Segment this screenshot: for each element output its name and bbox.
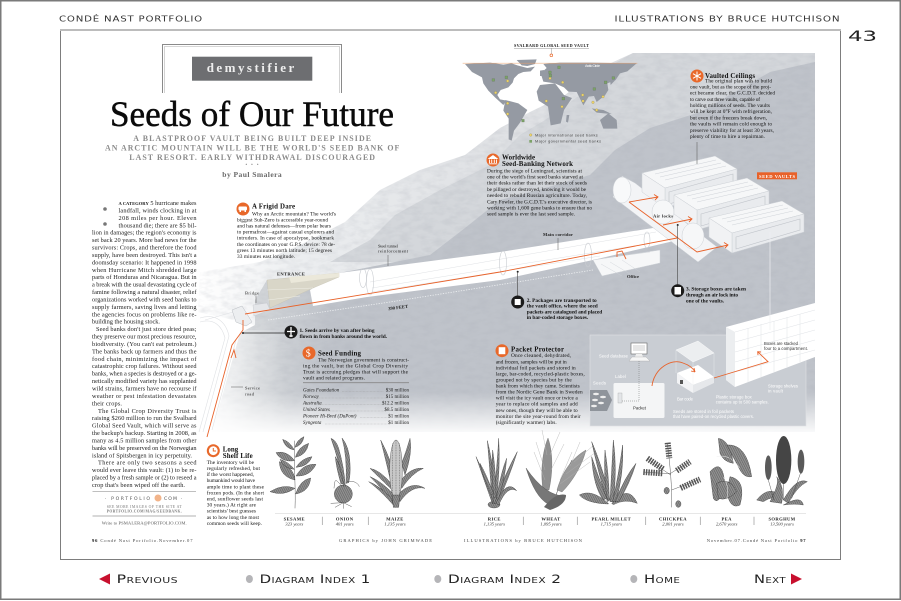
vault 1 [642, 156, 737, 208]
main article text: famine following a natural disaster, relief [92, 289, 197, 296]
panel labels: Boxes are stacked [764, 341, 799, 346]
panel: packet diagram [590, 232, 815, 426]
callout: long shelf life: scientists' best guesses [207, 509, 256, 515]
callout: long shelf life [207, 444, 265, 527]
callout: long shelf life: The inventory will be [207, 460, 255, 466]
callout: vaulted ceilings [690, 70, 775, 164]
callout: a frigid dare: Why an Arctic mountain? The world's [252, 211, 336, 217]
map legend: Major international seed banks [535, 133, 598, 137]
nav: next: Next [754, 572, 786, 586]
map label: Svalbard [514, 43, 589, 57]
step 1: seeds arrive [242, 326, 388, 340]
main article text: banks, when a species is destroyed or a ge- [92, 371, 196, 378]
step 1: seeds arrive: flown in from banks around the world. [300, 334, 388, 340]
vault 3 [709, 201, 804, 253]
main article text: placed by a fresh sample or (2) to reseed a [92, 474, 197, 482]
main article text: biodiversity. (You can't eat petroleum.) [92, 341, 196, 348]
main article text [92, 200, 197, 489]
main article text: building the housing stock. [92, 319, 160, 326]
plant labels: PEA [722, 516, 732, 522]
seed vaults tag: SEED VAULTS [759, 174, 795, 179]
callout: packet protector: monitor the site year-round from their [496, 413, 581, 420]
main article text: the backup's backup. Starting in 2008, as [92, 430, 197, 437]
page number: 43 [848, 29, 877, 45]
map continents [465, 59, 637, 141]
step 2: packages: packets are catalogued and placed [527, 309, 602, 315]
main article text: would ever leave this vault: (1) to be re- [92, 467, 196, 474]
icon: snowflake [690, 70, 704, 82]
callout: packet protector: and frozen, samples will be put in [496, 358, 567, 365]
callout: worldwide seed-banking network: one of the world's first seed banks starved at [487, 174, 584, 180]
panel labels: Seeds [593, 380, 606, 386]
nav: diagram index 1 [246, 572, 371, 586]
step 3: storage boxes [671, 224, 746, 304]
panel labels: four to a compartment. [764, 346, 808, 351]
step 1: seeds arrive: 1. Seeds arrive by van after being [300, 328, 375, 334]
panel labels: Plastic storage box [716, 394, 753, 400]
plant labels: 1,135 years [384, 522, 406, 528]
diagram label: main corridor [543, 232, 573, 250]
funding table: United States [303, 408, 330, 413]
panel labels: Seeds are stored in foil packets [673, 409, 734, 414]
demystifier banner: demystifier [207, 60, 295, 75]
funding table: Norway [302, 395, 320, 400]
plant labels: PEARL MILLET [591, 516, 631, 522]
subtitle: LAST RESORT. EARLY WITHDRAWAL DISCOURAGED [129, 153, 375, 162]
callout: long shelf life: 30 years.) At right are [207, 502, 257, 509]
diagram label: tunnel length: 390 FEET [388, 304, 408, 311]
callout: packet protector: grouped not by species but by the [496, 378, 572, 384]
funding table [302, 383, 409, 426]
nav: home [630, 572, 680, 586]
map: arctic circle: Arctic Circle [585, 64, 600, 68]
portfolio.com callout: PORTFOLIO.COM/MAG/SEEDBANK. [107, 510, 182, 514]
main article text: lion in damages; the region's economy is [92, 230, 197, 237]
callout: seed funding: Seed Funding [318, 350, 362, 358]
main article text: wild strains, farmers have no recourse if [92, 386, 197, 392]
tunnel ribs [360, 232, 650, 295]
main article text: organizations worked with seed banks to [92, 296, 196, 304]
plant: onion [331, 438, 359, 509]
plant labels: ONION [336, 516, 354, 522]
callout: packet protector: Once cleaned, dehydrated, [511, 353, 571, 359]
callout: long shelf life: if the worst happened, [207, 471, 254, 478]
main article text: weather or pest infestation devastates [92, 393, 197, 400]
step 2: packages [511, 271, 602, 321]
map label: Svalbard: SVALBARD GLOBAL SEED VAULT [514, 43, 589, 48]
callout: worldwide seed-banking network: Cary Fowler, the G.C.D.T.'s executive director, is [487, 199, 592, 205]
portfolio.com callout: Write to PSMALERA@PORTFOLIO.COM. [102, 520, 187, 526]
packet [614, 361, 664, 418]
callout: long shelf life: humankind would have [207, 478, 256, 484]
callout: packet protector: individual foil packets and stored in [496, 364, 576, 371]
nav: previous: Previous [117, 572, 178, 586]
callout: long shelf life: regularly refreshed, but [207, 465, 260, 472]
byline: by Paul Smalera [222, 170, 282, 179]
diagram label: air locks: Air locks [653, 214, 673, 218]
main article text: raising $260 million to run the Svalbard [92, 415, 197, 422]
main article text: set back 20 years. More bad news for the [92, 237, 197, 244]
funding table: $15 million [386, 395, 409, 400]
callout: vaulted ceilings: one vault, but as the scope of the proj- [690, 84, 771, 90]
plant: sorghum [757, 436, 807, 505]
funding table: $1 million [388, 414, 409, 420]
portfolio.com callout: SEE MORE IMAGES OF THE SITE AT [107, 505, 182, 509]
plant labels: RICE [488, 516, 501, 522]
packet: Packet [633, 406, 647, 410]
folio left: 96 Condé Nast Portfolio.November.07 [92, 538, 193, 543]
callout: long shelf life: as to how long the most [207, 515, 260, 521]
main article text: landfall, winds clocking in at [118, 207, 197, 214]
title: Seeds of Our Future [110, 94, 394, 134]
portfolio.com callout: · PORTFOLIO [105, 496, 150, 502]
icon: bank [486, 154, 500, 166]
callout: vaulted ceilings: but even if the freezers break down, [690, 114, 767, 121]
callout: a frigid dare: to permafrost—against casual explorers and [237, 229, 334, 236]
callout: worldwide seed-banking network: their desks rather than let their stock of seeds [487, 180, 587, 187]
folio right: November.07.Condé Nast Portfolio 97 [707, 538, 806, 543]
plant labels: CHICKPEA [659, 516, 687, 522]
callout: packet protector: Packet Protector [511, 346, 564, 354]
map: international seed banks [494, 77, 604, 115]
main article text: the agencies focus on problems like re- [92, 311, 196, 318]
diagram label: office: Office [627, 274, 639, 279]
funding table: $8.5 million [385, 408, 409, 413]
callout: packet protector: large, bar-coded, recycled-plastic boxes, [496, 371, 585, 377]
icon: dollar: $ [306, 348, 311, 360]
main article text: crop that's been wiped off the earth. [92, 482, 185, 489]
entrance block [267, 273, 339, 308]
callout: vaulted ceilings: preserve viability for at least 30 years, [690, 127, 774, 134]
nav: next [754, 572, 802, 586]
airlock 2 [682, 223, 704, 249]
vault 2 [674, 178, 769, 230]
main article text: food chain, minimizing the impact of [92, 356, 197, 363]
funding table: $30 million [386, 388, 409, 394]
callout: vaulted ceilings: will be kept at 0°F with refrigeration, [690, 108, 772, 115]
main article text: when Hurricane Mitch shredded large [92, 267, 197, 274]
computer [629, 343, 650, 361]
portfolio.com callout: COM · [164, 496, 182, 502]
road [199, 310, 240, 432]
icon: polar bear [236, 202, 250, 216]
callout: seed funding [302, 346, 409, 426]
step 2: packages: the vault office, where the seed [527, 304, 598, 310]
callout: a frigid dare: grees 13 minutes north latitude; 15 degrees [237, 248, 332, 254]
callout: seed funding: vault and related programs. [303, 376, 365, 382]
diagram label: bridge [245, 290, 259, 303]
main article text: There are only two seasons a seed [98, 460, 197, 467]
panel labels: in vault [768, 388, 784, 394]
map legend [529, 133, 601, 144]
seeds tray [590, 390, 612, 411]
storage box [676, 341, 714, 393]
plant: rice [476, 438, 517, 508]
plants baseline [275, 512, 806, 514]
main article text: 208 miles per hour. Eleven [118, 215, 197, 222]
seed vaults tag [757, 172, 797, 179]
step 2: packages: 2. Packages are transported to [527, 298, 597, 304]
callout: long shelf life: frozen pods. (In the short [207, 489, 264, 496]
diagram label: steel tunnel reinforcement: Steel tunnel [378, 244, 399, 248]
callout: long shelf life: end, sunflower seeds last [207, 496, 264, 502]
subtitle: · · · [245, 160, 259, 169]
header left: publication: CONDÉ NAST PORTFOLIO [59, 14, 203, 24]
nav: diagram index 2: Diagram Index 2 [448, 572, 561, 586]
callout: packet protector: will visit the icy vault once or twice a [496, 396, 578, 402]
orange arrows [652, 352, 768, 386]
main article text: catastrophic crop failures. Without seed [92, 363, 197, 370]
subtitle: A BLASTPROOF VAULT BEING BUILT DEEP INSIDE [133, 134, 371, 143]
funding table: Gates Foundation [303, 388, 340, 394]
world map [463, 43, 637, 144]
plant labels: SESAME [284, 516, 305, 522]
callout: a frigid dare: A Frigid Dare [252, 204, 295, 210]
plant labels: 2,670 years [716, 522, 738, 528]
plant: maize [369, 438, 425, 507]
mountain background [195, 53, 818, 436]
diagram label: entrance: ENTRANCE [277, 272, 305, 276]
plant labels: 13,500 years [770, 522, 794, 528]
main article text: supply, have been destroyed. This isn't a [92, 252, 197, 259]
callout: vaulted ceilings: to carve out three vaults, capable of [690, 96, 760, 103]
main article text: banks will be preserved on the Norwegian [92, 445, 197, 452]
plant labels: 1,135 years [484, 522, 505, 528]
side bullets [103, 207, 107, 226]
callout: vaulted ceilings: Vaulted Ceilings [705, 73, 755, 80]
dotted measure line [268, 270, 593, 320]
plant labels: 1,095 years [540, 522, 562, 528]
main article text: they preserve our most precious resource, [92, 334, 197, 341]
step 3: storage boxes: 3. Storage boxes are taken [686, 286, 746, 292]
callout: vaulted ceilings: ect became clear, the G.C.D.T. decided [690, 91, 775, 97]
main article text: a break with the usual devastating cycle of [92, 282, 197, 289]
callout: packet protector: new ones, though they will be able to [496, 408, 578, 414]
main article text: A CATEGORY 5 hurricane makes [118, 200, 197, 207]
funding table: Australia [302, 402, 322, 406]
illustrations credit: ILLUSTRATIONS by BRUCE HUTCHISON [464, 538, 583, 543]
main article text: Seed banks don't just store dried peas; [96, 326, 197, 333]
seed tunnel [310, 228, 678, 306]
callout: a frigid dare: 33 minutes east longitude. [237, 254, 295, 260]
plant labels: MAIZE [386, 516, 404, 522]
plant labels: 2,001 years [662, 522, 684, 528]
callout: seed funding: The Norwegian government is construct- [318, 358, 409, 364]
main article text: netically modified variety has supplanted [92, 378, 197, 385]
diagram label: steel tunnel reinforcement [378, 244, 409, 266]
map: government seed banks [492, 66, 615, 122]
main article text: their crops. [92, 400, 122, 407]
callout: packet protector: from the Nordic Gene Bank in Sweden [496, 389, 583, 396]
subtitle: AN ARCTIC MOUNTAIN WILL BE THE WORLD'S SEED BANK OF [105, 144, 399, 152]
callout: packet protector: (significantly warmer) labs. [496, 419, 557, 426]
panel labels: Bar code [677, 396, 694, 402]
diagram label: service road: road [245, 392, 255, 396]
funding table: Syngenta [303, 421, 322, 426]
callout: vaulted ceilings: The original plan was to build [705, 78, 772, 84]
plant labels: SORGHUM [768, 516, 796, 522]
cross corridor [613, 176, 717, 262]
callout: a frigid dare: and has natural defenses—from polar bears [237, 222, 331, 230]
icon: clock [207, 444, 220, 457]
vehicle and bridge [232, 303, 270, 326]
callout: worldwide seed-banking network: Worldwide [502, 154, 535, 162]
airlock 1 [652, 200, 674, 224]
callout: packet protector: year to replace old samples and add [496, 402, 578, 408]
panel labels: Storage shelves [768, 384, 798, 388]
icon: plane [284, 326, 298, 338]
callout: long shelf life: common seeds will keep. [207, 521, 262, 527]
callout: worldwide seed-banking network: working with 1,600 gene banks to ensure that no [487, 206, 592, 212]
callout: worldwide seed-banking network: be pillaged or destroyed, knowing it would be [487, 187, 587, 193]
callout: seed funding: Trust is accruing pledges that will support the [303, 370, 409, 376]
plant: pearl millet [579, 440, 637, 505]
diagram label: main corridor: Main corridor [543, 232, 573, 237]
subtitle [105, 134, 399, 169]
callout: a frigid dare [236, 202, 336, 260]
main article text: island of Spitsbergen in icy perpetuity. [92, 452, 192, 459]
plant labels: 1,715 years [601, 522, 622, 528]
nav: home: Home [644, 572, 680, 586]
callout: long shelf life: Long [223, 446, 239, 454]
panel labels: Label [615, 374, 626, 379]
plant: chickpea [643, 443, 700, 507]
step 3: storage boxes: through an air lock into [686, 292, 738, 298]
icon: package [511, 296, 524, 308]
main article text: many as 4.5 million samples from other [92, 437, 197, 444]
main article text: doomsday scenario: It happened in 1998 [92, 259, 196, 266]
icon: packet [496, 344, 508, 357]
orange route [207, 194, 728, 437]
funding table: Pioneer Hi-Bred (DuPont) [302, 414, 357, 420]
callout: long shelf life: Shelf Life [223, 453, 253, 460]
funding table: $12.2 million [382, 402, 409, 406]
nav: diagram index 1: Diagram Index 1 [260, 572, 371, 586]
office [593, 250, 660, 276]
tunnel diagram [207, 156, 804, 437]
main article text: The banks back up farmers and thus the [92, 348, 197, 355]
portfolio.com callout [92, 492, 196, 526]
main article text: Global Seed Vault, which will serve as [92, 423, 197, 430]
plant labels: WHEAT [541, 516, 561, 522]
panel labels: Seed database [599, 354, 629, 358]
map legend: Major governmental seed banks [535, 140, 601, 144]
plant: sesame [270, 437, 316, 508]
plant labels: 401 years [336, 522, 354, 526]
callout: packet protector: bank from which they came. Scientists [496, 382, 580, 390]
panel labels: that have paired-on recycled plastic covers. [673, 414, 754, 419]
diagram label: service road: Service [245, 386, 260, 390]
callout: worldwide seed-banking network: seed sample is ever the last seed sample. [487, 212, 575, 218]
nav: previous [99, 572, 178, 586]
callout: worldwide seed-banking network: Seed-Banking Network [502, 161, 573, 168]
step 3: storage boxes: one of the vaults. [686, 298, 725, 304]
callout: packet protector [496, 344, 585, 426]
diagram label: steel tunnel reinforcement: reinforcement [378, 248, 409, 254]
callout: vaulted ceilings: plenty of time to hire a repairman. [690, 133, 765, 140]
funding table: $1 million [388, 421, 409, 426]
callout: worldwide seed-banking network [486, 154, 592, 218]
callout: vaulted ceilings: the vaults will remain cold enough to [690, 122, 772, 128]
callout: a frigid dare: intruders. In case of apocalypse, bookmark [237, 235, 334, 242]
main article text: supply farmers, saving lives and letting [92, 304, 197, 311]
diagram label: service road [231, 386, 260, 396]
header right: illustrator credit: ILLUSTRATIONS BY BRUCE HUTCHISON [614, 14, 840, 24]
plant: pea [710, 438, 752, 506]
callout: a frigid dare: the coordinates on your G.P.S. device: 78 de- [237, 242, 335, 248]
main article text: thousand die; there are $5 bil- [118, 222, 196, 229]
storage wall [726, 303, 815, 387]
callout: worldwide seed-banking network: needed to rebuild Russian agriculture. Today, [487, 193, 587, 199]
main article text: parts of Honduras and Nicaragua. But in [92, 274, 197, 281]
main article text: survivors: Crops, and therefore the food [92, 244, 197, 252]
main article text: The Global Crop Diversity Trust is [98, 408, 197, 415]
callout: a frigid dare: biggest Sub-Zero is accessible year-round [237, 217, 328, 223]
callout: seed funding: ing the vault, but the Global Crop Diversity [303, 364, 408, 370]
step 2: packages: in bar-coded storage boxes. [527, 315, 589, 321]
plant: wheat [526, 430, 596, 510]
panel labels: contains up to 500 samples. [716, 400, 769, 404]
panel labels [593, 232, 808, 419]
plant labels [284, 516, 796, 528]
demystifier banner [162, 44, 342, 93]
callout: long shelf life: ample time to plant these [207, 484, 265, 490]
callout: vaulted ceilings: holding millions of seeds. The vaults [690, 102, 770, 109]
icon: box [671, 284, 684, 297]
diagram label: bridge: Bridge [245, 290, 259, 296]
callout: worldwide seed-banking network: During the siege of Leningrad, scientists at [487, 167, 582, 174]
graphics credit: GRAPHICS by JOHN GRIMWADE [339, 538, 432, 543]
plant labels: 323 years [285, 522, 304, 526]
nav: diagram index 2 [434, 572, 561, 586]
